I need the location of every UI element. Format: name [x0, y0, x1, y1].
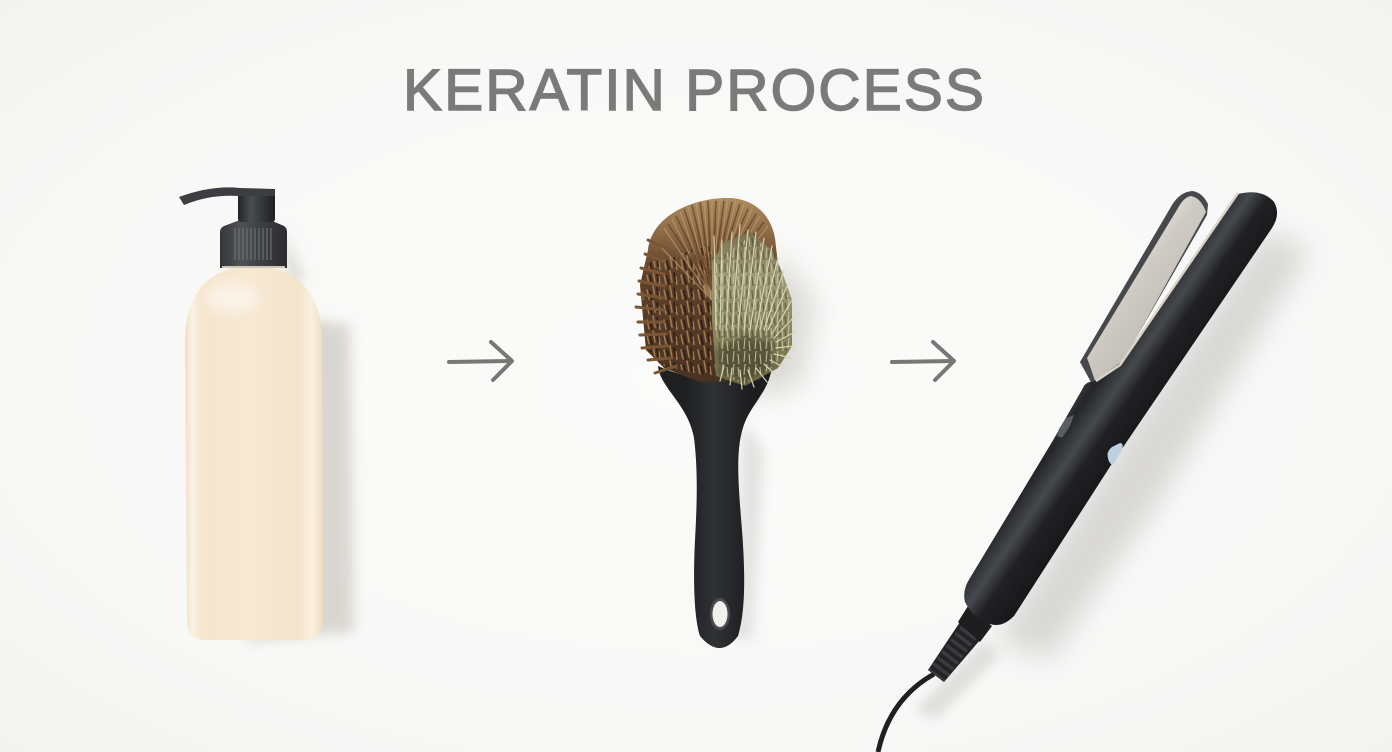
iron button: [1108, 443, 1123, 465]
brown bristles: [636, 198, 782, 382]
icon: flat iron: [878, 191, 1310, 752]
icon: hair brush: [636, 198, 815, 648]
light bristles: [712, 224, 795, 389]
upper arm frame: [1080, 191, 1208, 384]
bottle body: [185, 268, 323, 640]
arrow 2: [892, 342, 954, 380]
iron control marks: [1057, 415, 1074, 438]
title: KERATIN PROCESS: [403, 58, 986, 123]
icon: shampoo pump bottle: [179, 187, 354, 642]
power cord: [878, 674, 934, 752]
heating plate: [1087, 196, 1206, 381]
strain relief: [928, 606, 992, 682]
brush handle: [658, 362, 772, 648]
iron body: [964, 192, 1277, 625]
arrow 1: [449, 342, 512, 380]
pump collar: [220, 220, 287, 268]
pump spout: [179, 187, 275, 222]
